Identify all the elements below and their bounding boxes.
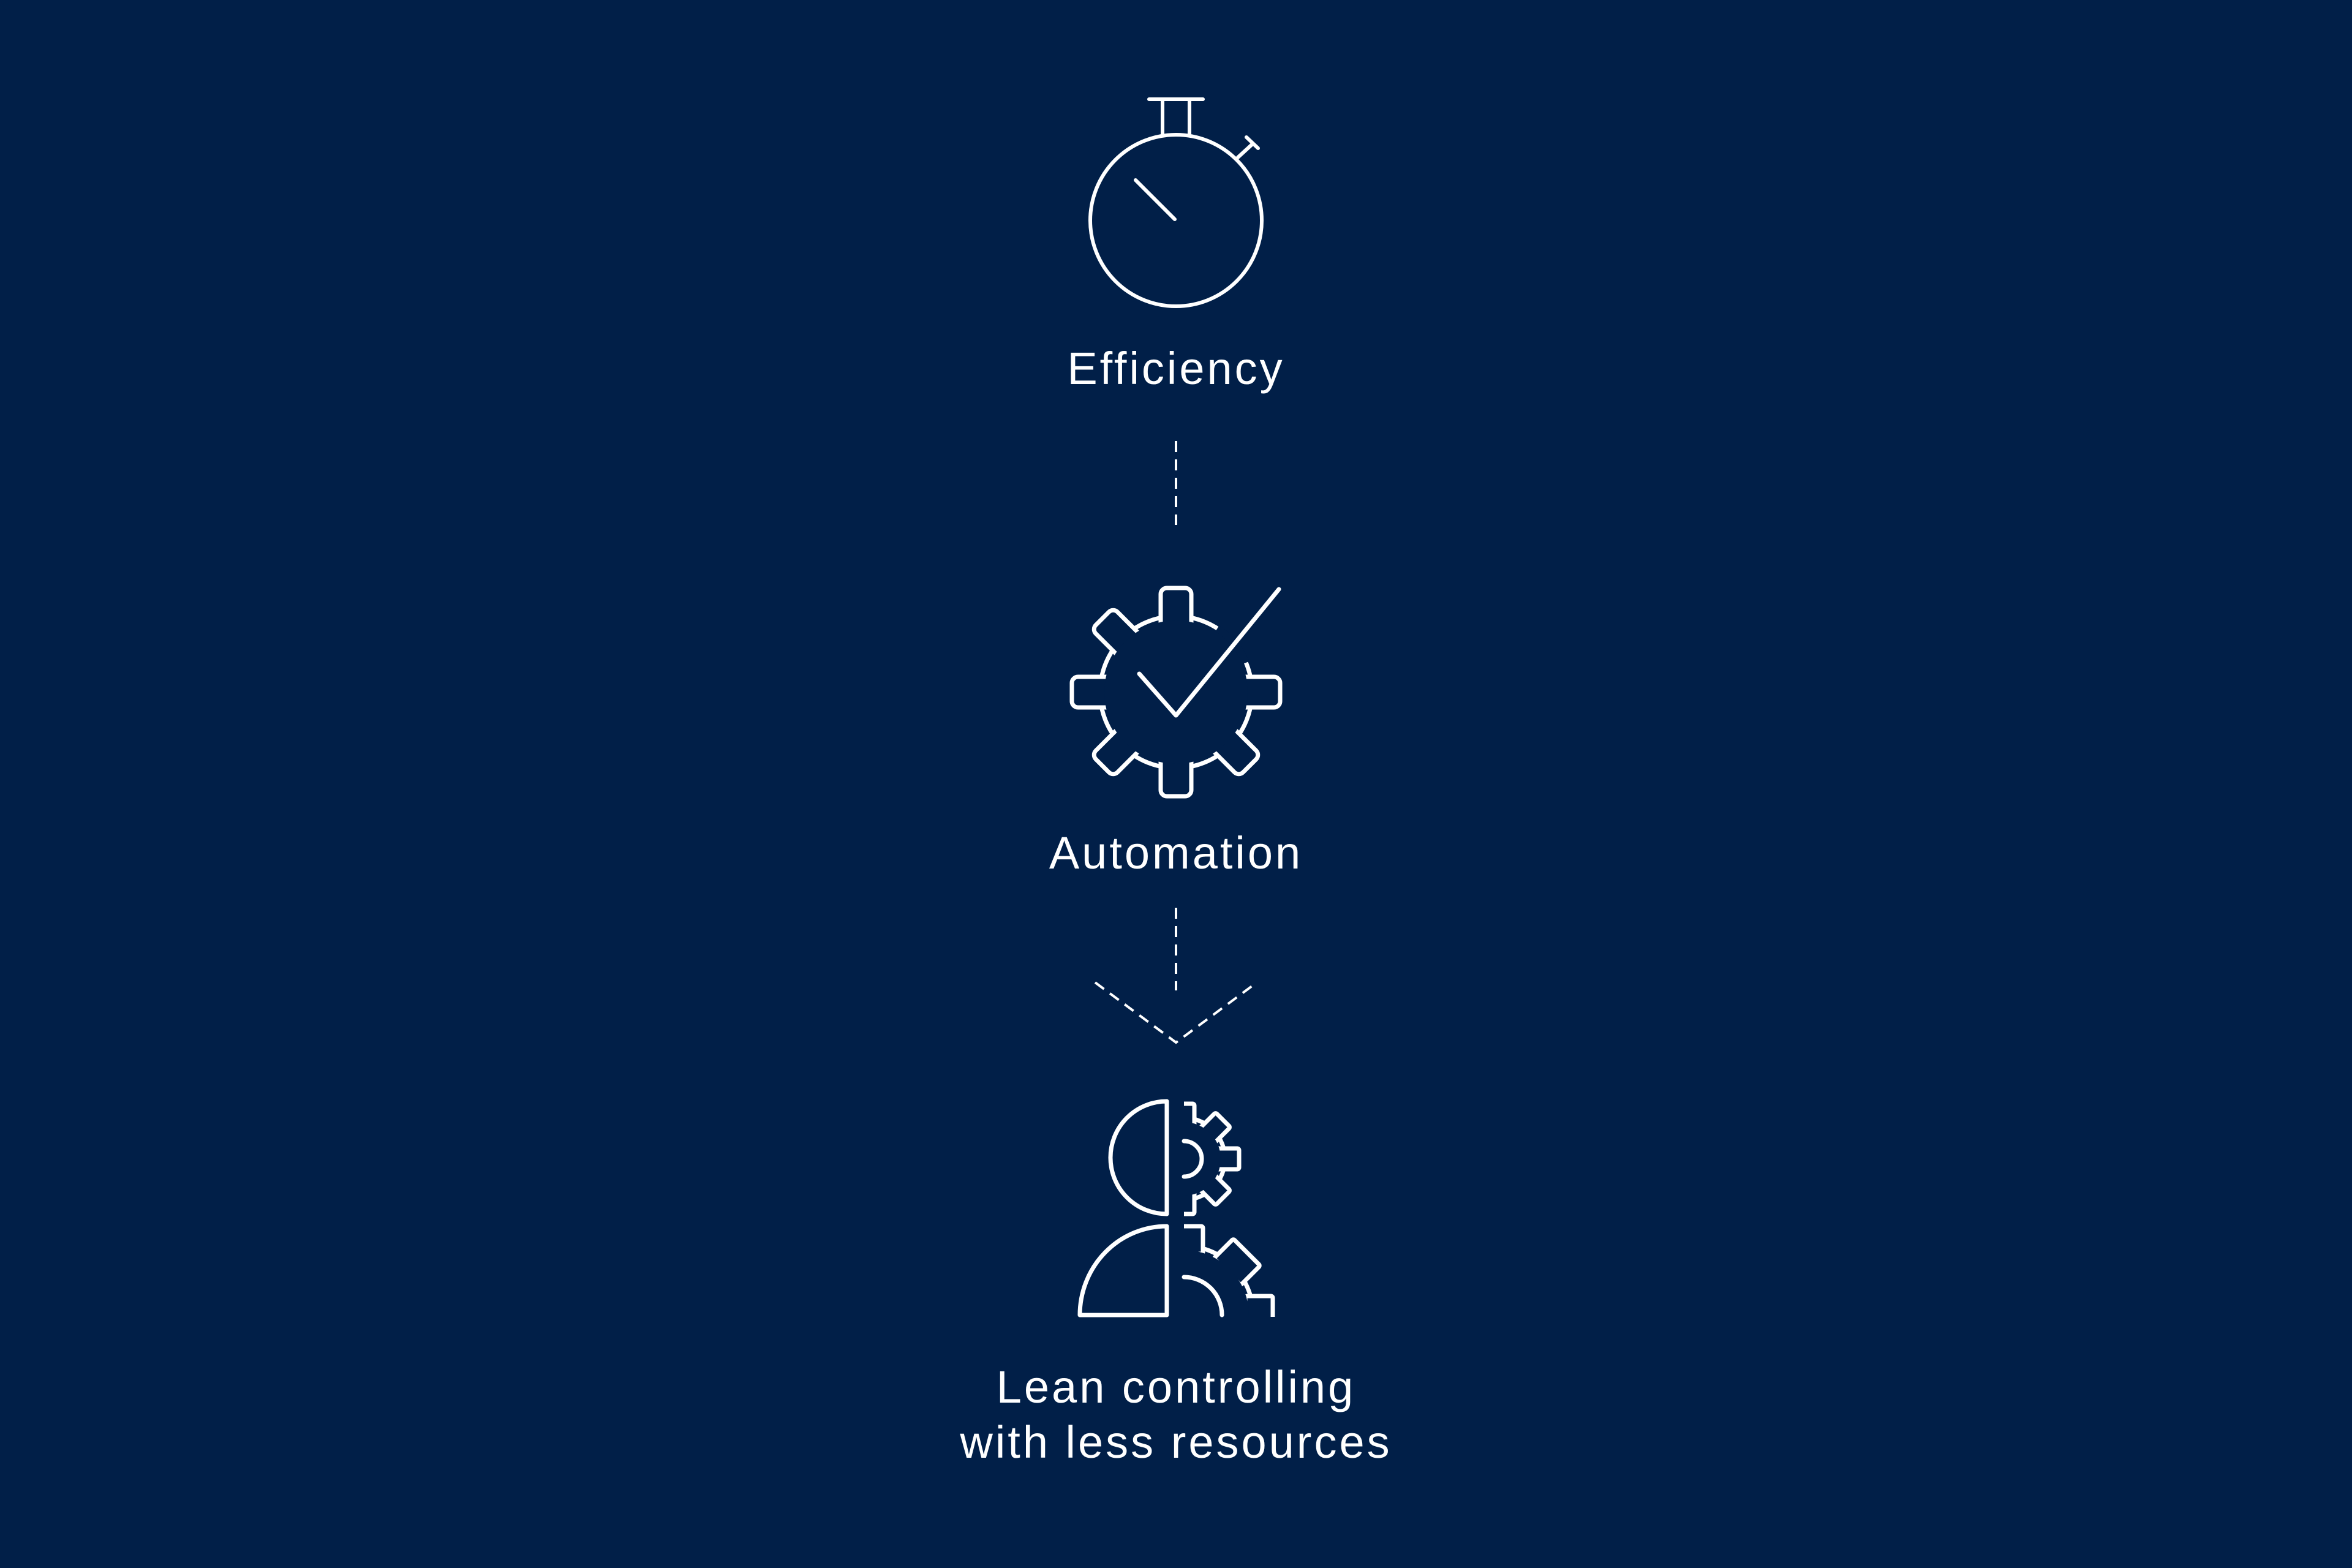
label: Lean controlling with less resources: Lean controlling [997,1362,1355,1412]
label: Efficiency: Efficiency [1067,343,1285,394]
icon: stopwatch [1090,99,1262,306]
icon: gear with checkmark [1072,588,1280,796]
arrow: dashed connector 1 [1175,441,1177,525]
icon: person and gears [1078,1099,1275,1317]
arrow: dashed connector with chevron [1095,908,1257,1042]
label: Automation: Automation [1049,827,1303,878]
label: Lean controlling with less resources: with less resources [959,1417,1392,1468]
